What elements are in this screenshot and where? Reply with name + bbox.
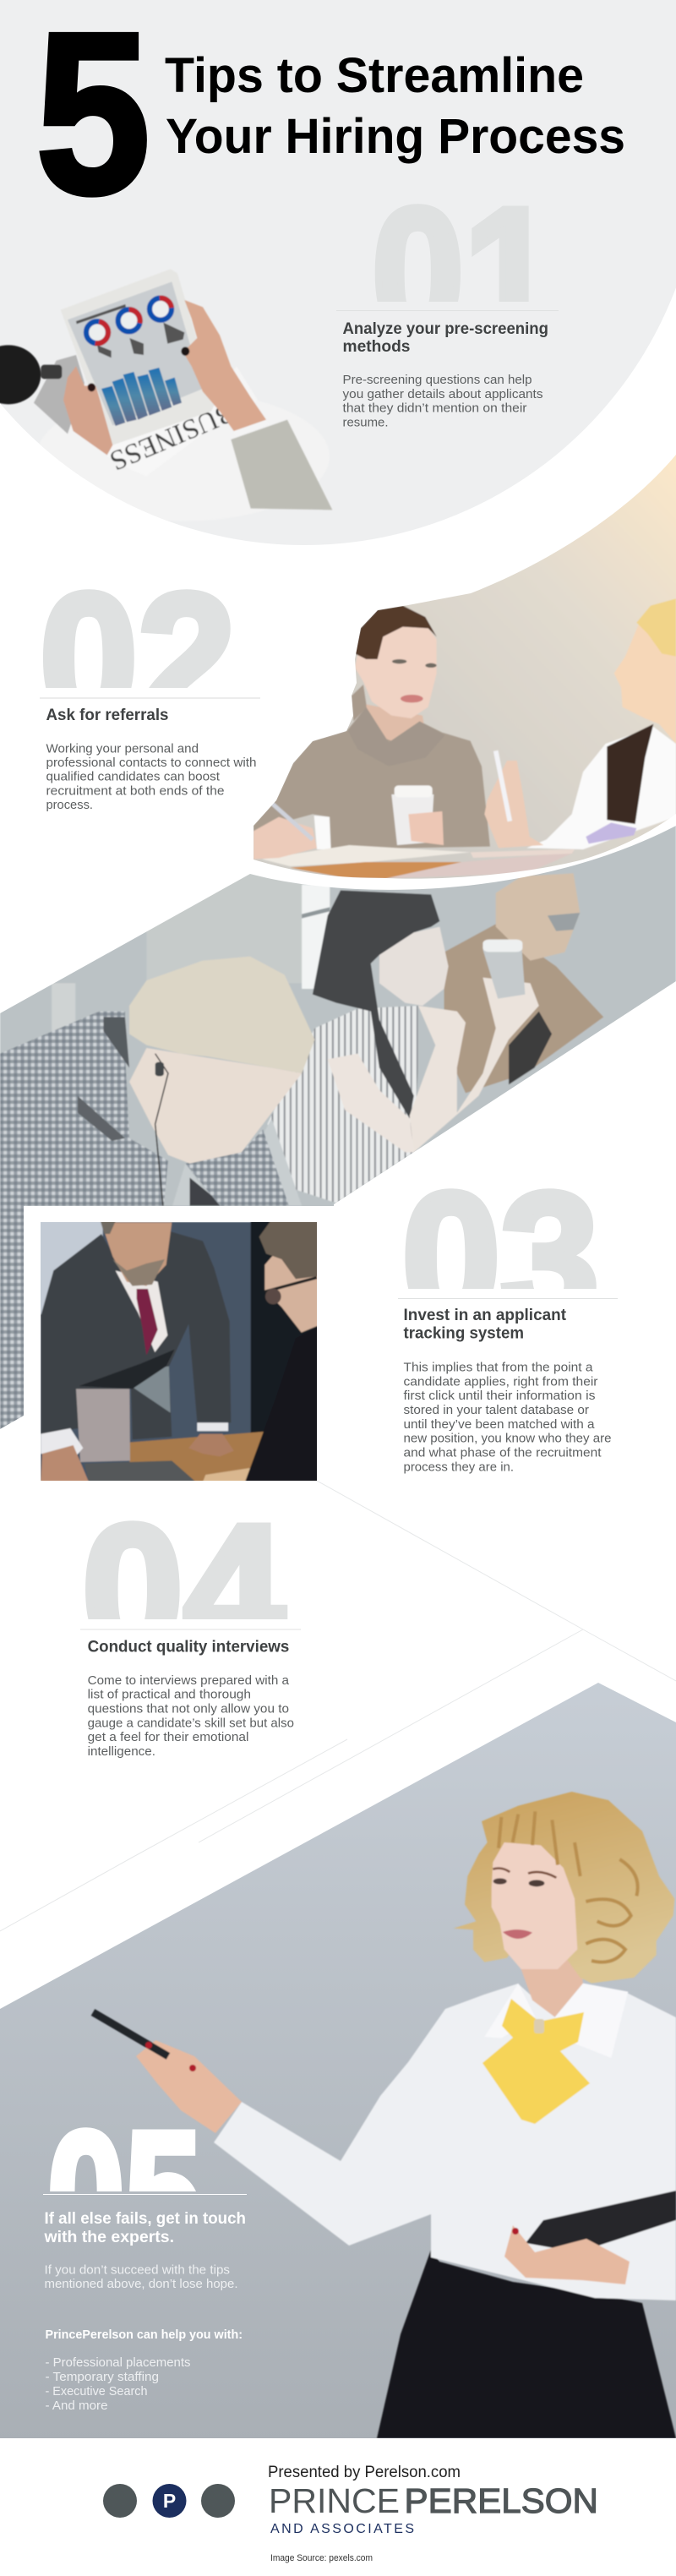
- tip 05: 05: [47, 2094, 202, 2300]
- tip 01: [336, 205, 559, 426]
- tip 05: [43, 2127, 247, 2410]
- tip 04: Come to interviews prepared with a: [88, 1674, 290, 1688]
- tip 04: questions that not only allow you to: [88, 1702, 289, 1716]
- icon: three logo dots: [103, 2484, 235, 2518]
- tip 02: [40, 589, 260, 811]
- title: Tips to Streamline: [165, 48, 584, 103]
- tip 02: qualified candidates can boost: [46, 771, 220, 784]
- tip 05: - And more: [46, 2399, 108, 2413]
- photo: two women talking: [245, 448, 676, 904]
- tip 05: If you don’t succeed with the tips: [44, 2263, 230, 2277]
- panel: white box behind suit photo: [24, 1206, 334, 1481]
- title: [165, 48, 625, 164]
- logo wordmark: [269, 2481, 598, 2520]
- tip 05: - Temporary staffing: [46, 2371, 159, 2384]
- tip 01: you gather details about applicants: [343, 388, 542, 401]
- tip 03: stored in your talent database or: [404, 1404, 589, 1417]
- photo: three colleagues band: [0, 820, 676, 1437]
- tip 03: Invest in an applicant: [404, 1307, 567, 1324]
- tip 02: Ask for referrals: [46, 707, 169, 724]
- tip 05: If all else fails, get in touch: [44, 2210, 246, 2228]
- tip 04: gauge a candidate’s skill set but also: [88, 1716, 294, 1730]
- photo: manager leaning over table: [40, 1221, 319, 1482]
- tip 05: with the experts.: [43, 2229, 174, 2246]
- tip 02: Working your personal and: [46, 742, 199, 756]
- footer: Presented by Perelson.com: [268, 2464, 461, 2481]
- tip 04: intelligence.: [88, 1745, 155, 1759]
- tip 04: [80, 1520, 301, 1758]
- tip 05: mentioned above, don’t lose hope.: [44, 2278, 238, 2291]
- tip 05: - Professional placements: [46, 2356, 191, 2370]
- tip 01: that they didn’t mention on their: [343, 402, 527, 416]
- panel: grey-blue background with presenter: [0, 1673, 676, 2442]
- tip 03: [398, 1188, 618, 1474]
- tip 01: 01: [372, 171, 556, 376]
- tip 03: tracking system: [404, 1325, 524, 1343]
- tip 04: Conduct quality interviews: [88, 1639, 289, 1656]
- tip 03: candidate applies, right from their: [404, 1375, 598, 1389]
- tip 01: Pre-screening questions can help: [343, 374, 532, 387]
- tip 05: - Executive Search: [46, 2385, 147, 2399]
- tip 05: PrincePerelson can help you with:: [46, 2328, 243, 2342]
- tip 03: This implies that from the point a: [404, 1361, 593, 1374]
- tip 03: first click until their information is: [404, 1389, 595, 1403]
- tip 02: recruitment at both ends of the: [46, 784, 225, 798]
- tip 02: process.: [46, 799, 93, 812]
- tip 03: and what phase of the recruitment: [404, 1447, 602, 1460]
- tip 02: 02: [40, 556, 236, 761]
- logo wordmark: PERELSON: [404, 2481, 598, 2520]
- footer: Image Source: pexels.com: [270, 2553, 373, 2563]
- tip 03: new position, you know who they are: [404, 1433, 612, 1446]
- tip 04: get a feel for their emotional: [88, 1731, 248, 1744]
- tip 03: 03: [402, 1155, 599, 1361]
- logo wordmark: PRINCE: [269, 2481, 400, 2520]
- tip 01: methods: [343, 338, 411, 356]
- icon: three logo dots: P: [163, 2490, 176, 2512]
- tip 03: process they are in.: [404, 1460, 514, 1474]
- tip 03: until they’ve been matched with a: [404, 1418, 595, 1432]
- tip 01: resume.: [343, 416, 389, 429]
- tip 04: 04: [82, 1487, 285, 1693]
- tip 04: list of practical and thorough: [88, 1689, 251, 1702]
- photo: tablet on desk: [0, 269, 332, 521]
- footer: AND ASSOCIATES: [270, 2522, 414, 2536]
- photo: presenter woman: [93, 1792, 676, 2438]
- title: Your Hiring Process: [166, 109, 625, 164]
- tip 01: Analyze your pre-screening: [343, 320, 548, 338]
- panel: top grey circle: [0, 0, 676, 545]
- tip 02: professional contacts to connect with: [46, 756, 257, 770]
- photo: tablet on desk: BUSINESS: [105, 396, 240, 477]
- footer: [0, 2438, 676, 2576]
